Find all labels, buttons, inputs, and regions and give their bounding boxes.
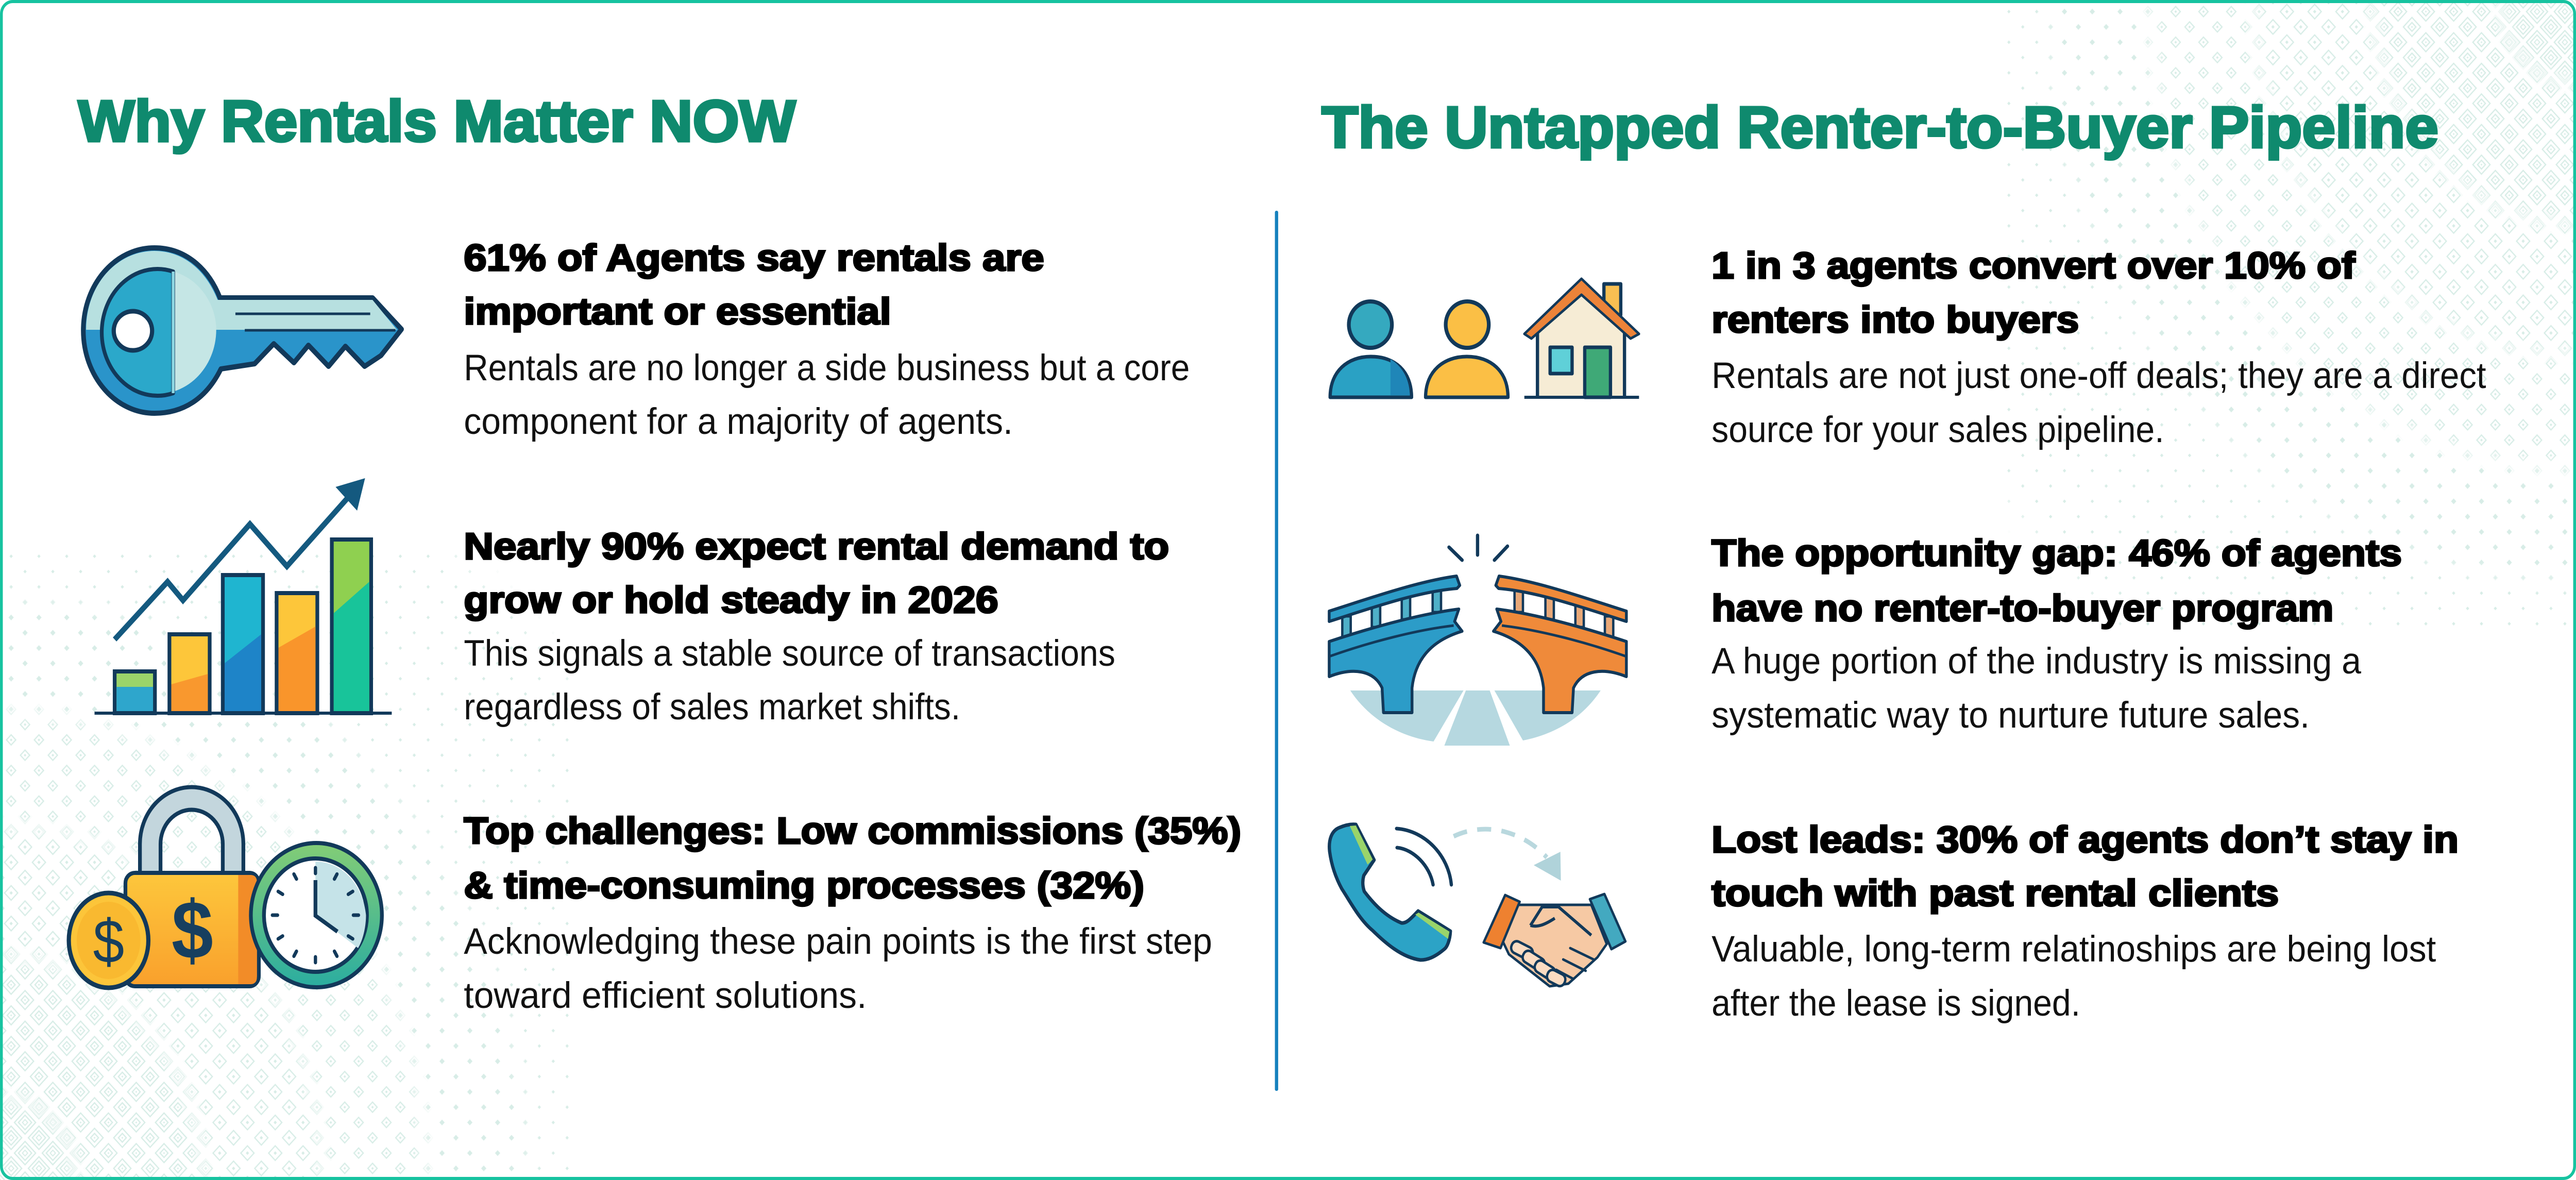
icon: key bbox=[83, 248, 401, 413]
icon: two people and a house bbox=[1330, 279, 1639, 397]
icon: padlock with coin and clock: $ bbox=[172, 885, 213, 976]
text block: 1 in 3 agents: 1 in 3 agents convert over 10% of bbox=[1711, 245, 2355, 286]
text block: lost leads: after the lease is signed. bbox=[1711, 983, 2080, 1024]
text block: nearly 90%: Nearly 90% expect rental demand to bbox=[464, 526, 1169, 567]
text block: 1 in 3 agents: Rentals are not just one-off deals; they are a direct bbox=[1711, 356, 2486, 396]
text block: top challenges: Acknowledging these pain points is the first step bbox=[464, 921, 1212, 962]
text block: nearly 90%: grow or hold steady in 2026 bbox=[464, 579, 998, 621]
icon: rising bar chart bbox=[95, 478, 392, 713]
text block: opportunity gap: A huge portion of the industry is missing a bbox=[1711, 641, 2361, 682]
text block: top challenges: Top challenges: Low commissions (35%) bbox=[464, 810, 1241, 852]
panel: the untapped renter-to-buyer pipeline bbox=[1321, 94, 2486, 1024]
panel: why rentals matter now bbox=[69, 88, 1241, 1016]
text block: nearly 90% bbox=[464, 526, 1169, 728]
text block: opportunity gap: have no renter-to-buyer program bbox=[1711, 587, 2333, 629]
text block: top challenges: toward efficient solutions. bbox=[464, 975, 867, 1016]
text block: 1 in 3 agents: source for your sales pipeline. bbox=[1711, 410, 2164, 450]
heading: untapped pipeline: The Untapped Renter-to-Buyer Pipeline bbox=[1321, 94, 2438, 160]
text block: 1 in 3 agents bbox=[1711, 245, 2486, 450]
text block: lost leads bbox=[1711, 819, 2459, 1024]
text block: 61% of agents: Rentals are no longer a side business but a core bbox=[464, 348, 1190, 389]
centre divider line bbox=[1275, 211, 1278, 1091]
text block: 61% of agents: important or essential bbox=[464, 291, 891, 332]
text block: opportunity gap: systematic way to nurture future sales. bbox=[1711, 695, 2310, 736]
icon: padlock with coin and clock bbox=[69, 799, 382, 988]
text block: top challenges bbox=[464, 810, 1241, 1016]
text block: nearly 90%: This signals a stable source of transactions bbox=[464, 633, 1115, 674]
text block: nearly 90%: regardless of sales market shifts. bbox=[464, 687, 960, 728]
text block: 1 in 3 agents: renters into buyers bbox=[1711, 299, 2079, 341]
text block: 61% of agents: 61% of Agents say rentals are bbox=[464, 237, 1044, 279]
text block: lost leads: touch with past rental clients bbox=[1711, 872, 2279, 914]
icon: padlock with coin and clock: $ bbox=[93, 907, 124, 976]
text block: opportunity gap bbox=[1711, 532, 2402, 736]
heading: why rentals matter now: Why Rentals Matter NOW bbox=[78, 88, 795, 154]
text block: opportunity gap: The opportunity gap: 46% of agents bbox=[1711, 532, 2402, 574]
text block: lost leads: Lost leads: 30% of agents don’t stay in bbox=[1711, 819, 2459, 861]
text block: 61% of agents: component for a majority of agents. bbox=[464, 401, 1013, 442]
icon: phone, dashed arrow and handshake bbox=[1329, 824, 1625, 988]
icon: broken bridge bbox=[1329, 535, 1626, 746]
text block: top challenges: & time-consuming processes (32%) bbox=[464, 865, 1144, 906]
text block: lost leads: Valuable, long-term relatinoships are being lost bbox=[1711, 929, 2436, 970]
text block: 61% of agents bbox=[464, 237, 1190, 442]
